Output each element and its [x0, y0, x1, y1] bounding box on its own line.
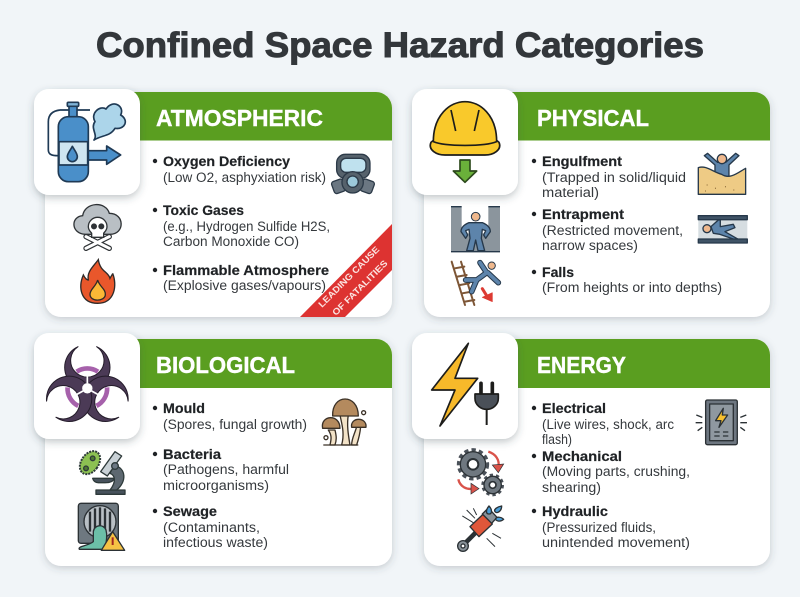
item: toxic gases	[153, 202, 330, 249]
item: oxygen deficiency	[153, 153, 326, 185]
item: sewage	[153, 503, 268, 550]
item: hydraulic: Hydraulic	[542, 503, 608, 519]
icon tile: biohazard	[34, 333, 140, 439]
item: engulfment: (Trapped in solid/liquid	[542, 170, 686, 185]
item: sewage: Sewage	[163, 503, 217, 519]
panel: physical	[412, 89, 770, 317]
item: sewage: infectious waste)	[163, 535, 268, 550]
item: oxygen deficiency: Oxygen Deficiency	[163, 153, 290, 169]
heading: atmospheric: ATMOSPHERIC	[156, 105, 323, 131]
item: bacteria: microorganisms)	[163, 478, 269, 493]
item: mechanical: shearing)	[542, 480, 601, 495]
item: hydraulic: unintended movement)	[542, 535, 690, 550]
item: entrapment: Entrapment	[542, 206, 624, 222]
panel: atmospheric	[34, 89, 392, 318]
icon: person in shaft	[451, 207, 500, 252]
panel: energy	[412, 333, 770, 566]
item: hydraulic: (Pressurized fluids,	[542, 520, 656, 535]
item: electrical: Electrical	[542, 400, 606, 416]
item: toxic gases: (e.g., Hydrogen Sulfide H2S,	[163, 219, 330, 234]
item: mechanical: (Moving parts, crushing,	[542, 464, 690, 479]
heading: physical: PHYSICAL	[537, 105, 649, 131]
item: falls	[532, 264, 722, 295]
item: engulfment: material)	[542, 185, 599, 200]
icon tile: oxygen cylinder	[34, 89, 140, 195]
icon tile: hard hat with arrow	[412, 89, 518, 195]
item: mould: (Spores, fungal growth)	[163, 417, 307, 432]
item: mechanical: Mechanical	[542, 448, 622, 464]
icon: gears with arrows	[458, 450, 504, 495]
icon: electrical panel	[696, 400, 747, 445]
heading: energy: ENERGY	[537, 352, 626, 378]
icon: engulfed person	[698, 153, 746, 194]
item: toxic gases: Toxic Gases	[163, 202, 244, 218]
item: electrical: flash)	[542, 432, 572, 447]
item: bacteria	[153, 446, 289, 493]
item: electrical	[532, 400, 674, 447]
icon: flame	[81, 260, 115, 303]
item: falls: Falls	[542, 264, 574, 280]
item: bacteria: Bacteria	[163, 446, 221, 462]
icon: person in narrow space	[698, 216, 747, 243]
item: flammable atmosphere: (Explosive gases/vapours)	[163, 278, 326, 293]
item: falls: (From heights or into depths)	[542, 280, 722, 295]
item: entrapment: narrow spaces)	[542, 238, 638, 253]
item: bacteria: (Pathogens, harmful	[163, 462, 289, 477]
icon: sewage drain with warning	[78, 503, 125, 550]
item: engulfment: Engulfment	[542, 153, 622, 169]
item: mould: Mould	[163, 400, 205, 416]
icon: gas mask	[331, 154, 375, 194]
item: toxic gases: Carbon Monoxide CO)	[163, 234, 299, 249]
item: entrapment	[532, 206, 683, 253]
ribbon: leading cause of fatalities: LEADING CAUSE	[316, 244, 381, 309]
item: engulfment	[532, 153, 686, 200]
icon tile: lightning bolt and plug	[412, 333, 518, 439]
icon: bacteria and microscope	[76, 447, 125, 494]
item: electrical: (Live wires, shock, arc	[542, 417, 674, 432]
icon: toxic cloud with skull	[74, 205, 121, 248]
item: mechanical	[532, 448, 690, 495]
item: oxygen deficiency: (Low O2, asphyxiation risk)	[163, 170, 326, 185]
icon: mushrooms	[322, 399, 366, 445]
title: Confined Space Hazard Categories	[96, 26, 704, 65]
item: sewage: (Contaminants,	[163, 520, 260, 535]
item: mould	[153, 400, 307, 432]
item: hydraulic	[532, 503, 690, 550]
ribbon: leading cause of fatalities	[300, 224, 392, 318]
icon: falling person on ladder	[452, 262, 498, 305]
heading: biological: BIOLOGICAL	[156, 352, 295, 378]
panel: biological	[34, 333, 392, 566]
item: flammable atmosphere	[153, 262, 329, 293]
ribbon: leading cause of fatalities: OF FATALITIES	[330, 258, 390, 318]
icon: burst hydraulic hose	[458, 506, 504, 551]
item: entrapment: (Restricted movement,	[542, 223, 683, 238]
item: flammable atmosphere: Flammable Atmosphere	[163, 262, 329, 278]
